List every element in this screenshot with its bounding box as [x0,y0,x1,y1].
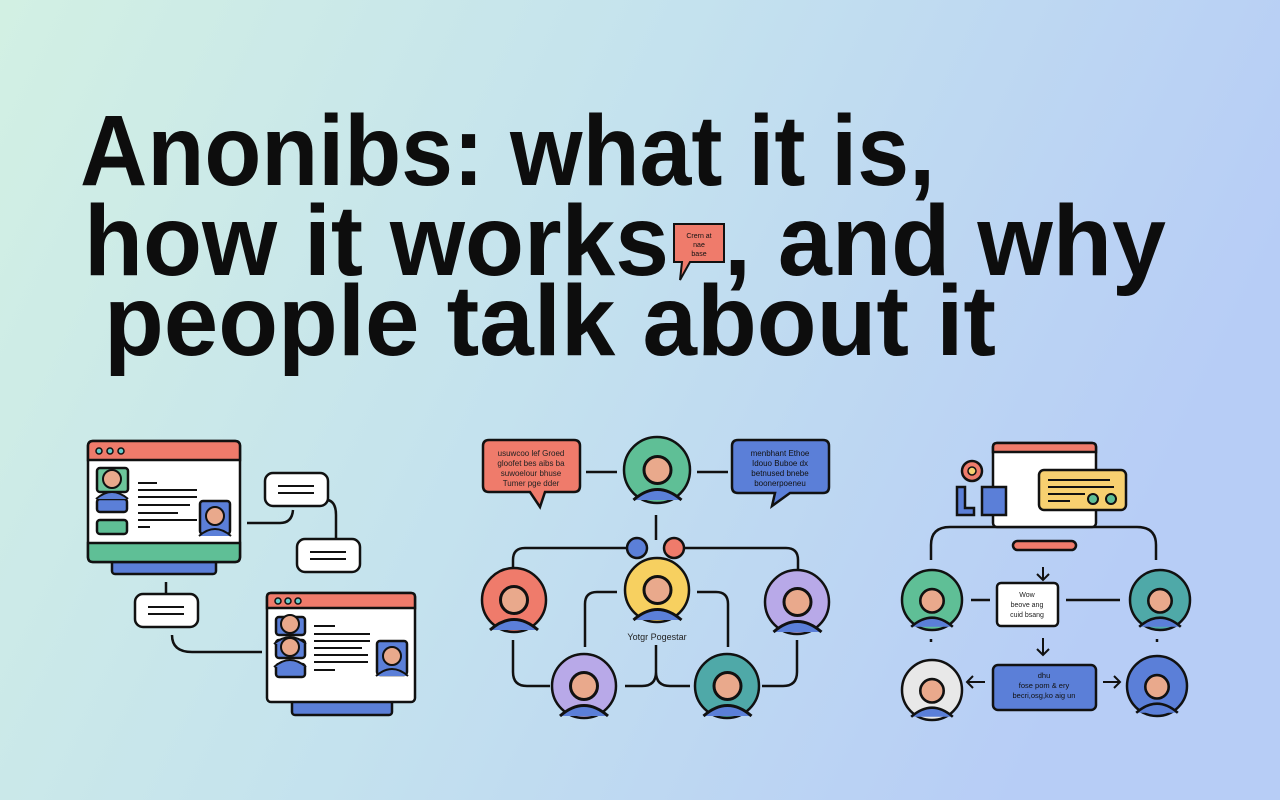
blue box: fose pom & ery [1019,681,1069,690]
speech bubble blue: Idouo Buboe dx [752,459,808,468]
speech bubble blue: betnused bnebe [751,469,809,478]
title: people talk about it [104,265,996,377]
blue box: dhu [1038,671,1050,680]
caption under central avatar: Yotgr Pogestar [627,632,687,642]
icon: small speech bubble in title: nae [693,242,705,249]
text box: Wow [1019,592,1036,599]
title: Anonibs: what it is, [80,95,935,207]
title: how it works [84,185,669,297]
text box [997,583,1058,626]
text box: beove ang [1011,602,1043,609]
text box: cuid bsang [1010,612,1044,619]
avatars [624,437,690,503]
window [993,443,1126,527]
panel: moderation flow [902,443,1190,720]
icon: small speech bubble in title: base [691,251,707,258]
blue box [993,665,1096,710]
avatars in panel 1 [96,470,408,676]
speech bubble red [483,440,580,507]
connector lines [166,500,336,652]
avatars [902,570,962,630]
title [80,95,1166,377]
speech bubble blue: menbhant Ethoe [751,449,810,458]
icon: small speech bubble in title: Crern at [686,233,712,240]
speech bubble red: suwoelour bhuse [501,469,562,478]
connector lines [513,472,798,686]
window 2 [267,593,415,715]
blue box: becri,osg,ko aig un [1013,691,1075,700]
panel: forum windows [88,441,415,715]
speech bubble blue [732,440,829,506]
bubbles [265,473,328,506]
speech bubble red: Tumer pge dder [503,479,560,488]
speech bubble red: usuwcoo lef Groed [498,449,564,458]
icon: user pin [957,461,1006,515]
panel: community network [482,437,829,718]
title: , and why [724,185,1166,297]
speech bubble red: gloofet bes aibs ba [497,459,565,468]
window 1 [88,441,240,574]
speech bubble blue: boonerpoeneu [754,479,806,488]
icon: small speech bubble in title [674,224,724,280]
